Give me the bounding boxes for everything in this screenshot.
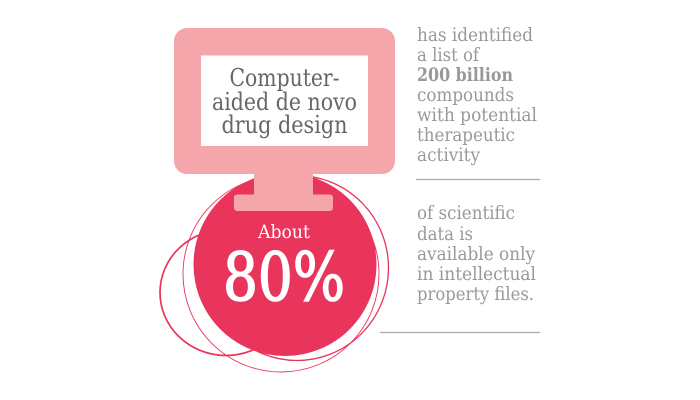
about 80%: About [257, 222, 311, 243]
text block: scientific data [417, 203, 536, 305]
text block: 200 billion: a list of [417, 45, 480, 66]
outline circles [160, 176, 388, 372]
text block: 200 billion: has identified [417, 25, 533, 46]
monitor title: aided de novo [212, 88, 357, 116]
monitor title: drug design [222, 111, 348, 139]
text block: 200 billion [417, 25, 537, 166]
monitor title [212, 64, 357, 139]
text block: scientific data: available only [417, 244, 535, 265]
text block: 200 billion: compounds [417, 85, 514, 106]
text block: scientific data: of scientific [417, 203, 515, 224]
text block: scientific data: property files. [417, 284, 534, 305]
monitor [174, 28, 395, 211]
text block: scientific data: data is [417, 224, 473, 245]
about 80%: 80% [223, 239, 345, 316]
text block: 200 billion: activity [417, 145, 480, 166]
text block: 200 billion: therapeutic [417, 125, 515, 146]
big red circle [194, 173, 376, 356]
text block: 200 billion: 200 billion [417, 65, 513, 86]
text block: 200 billion: with potential [417, 105, 537, 126]
monitor title: Computer- [230, 64, 340, 92]
text block: scientific data: in intellectual [417, 264, 536, 285]
